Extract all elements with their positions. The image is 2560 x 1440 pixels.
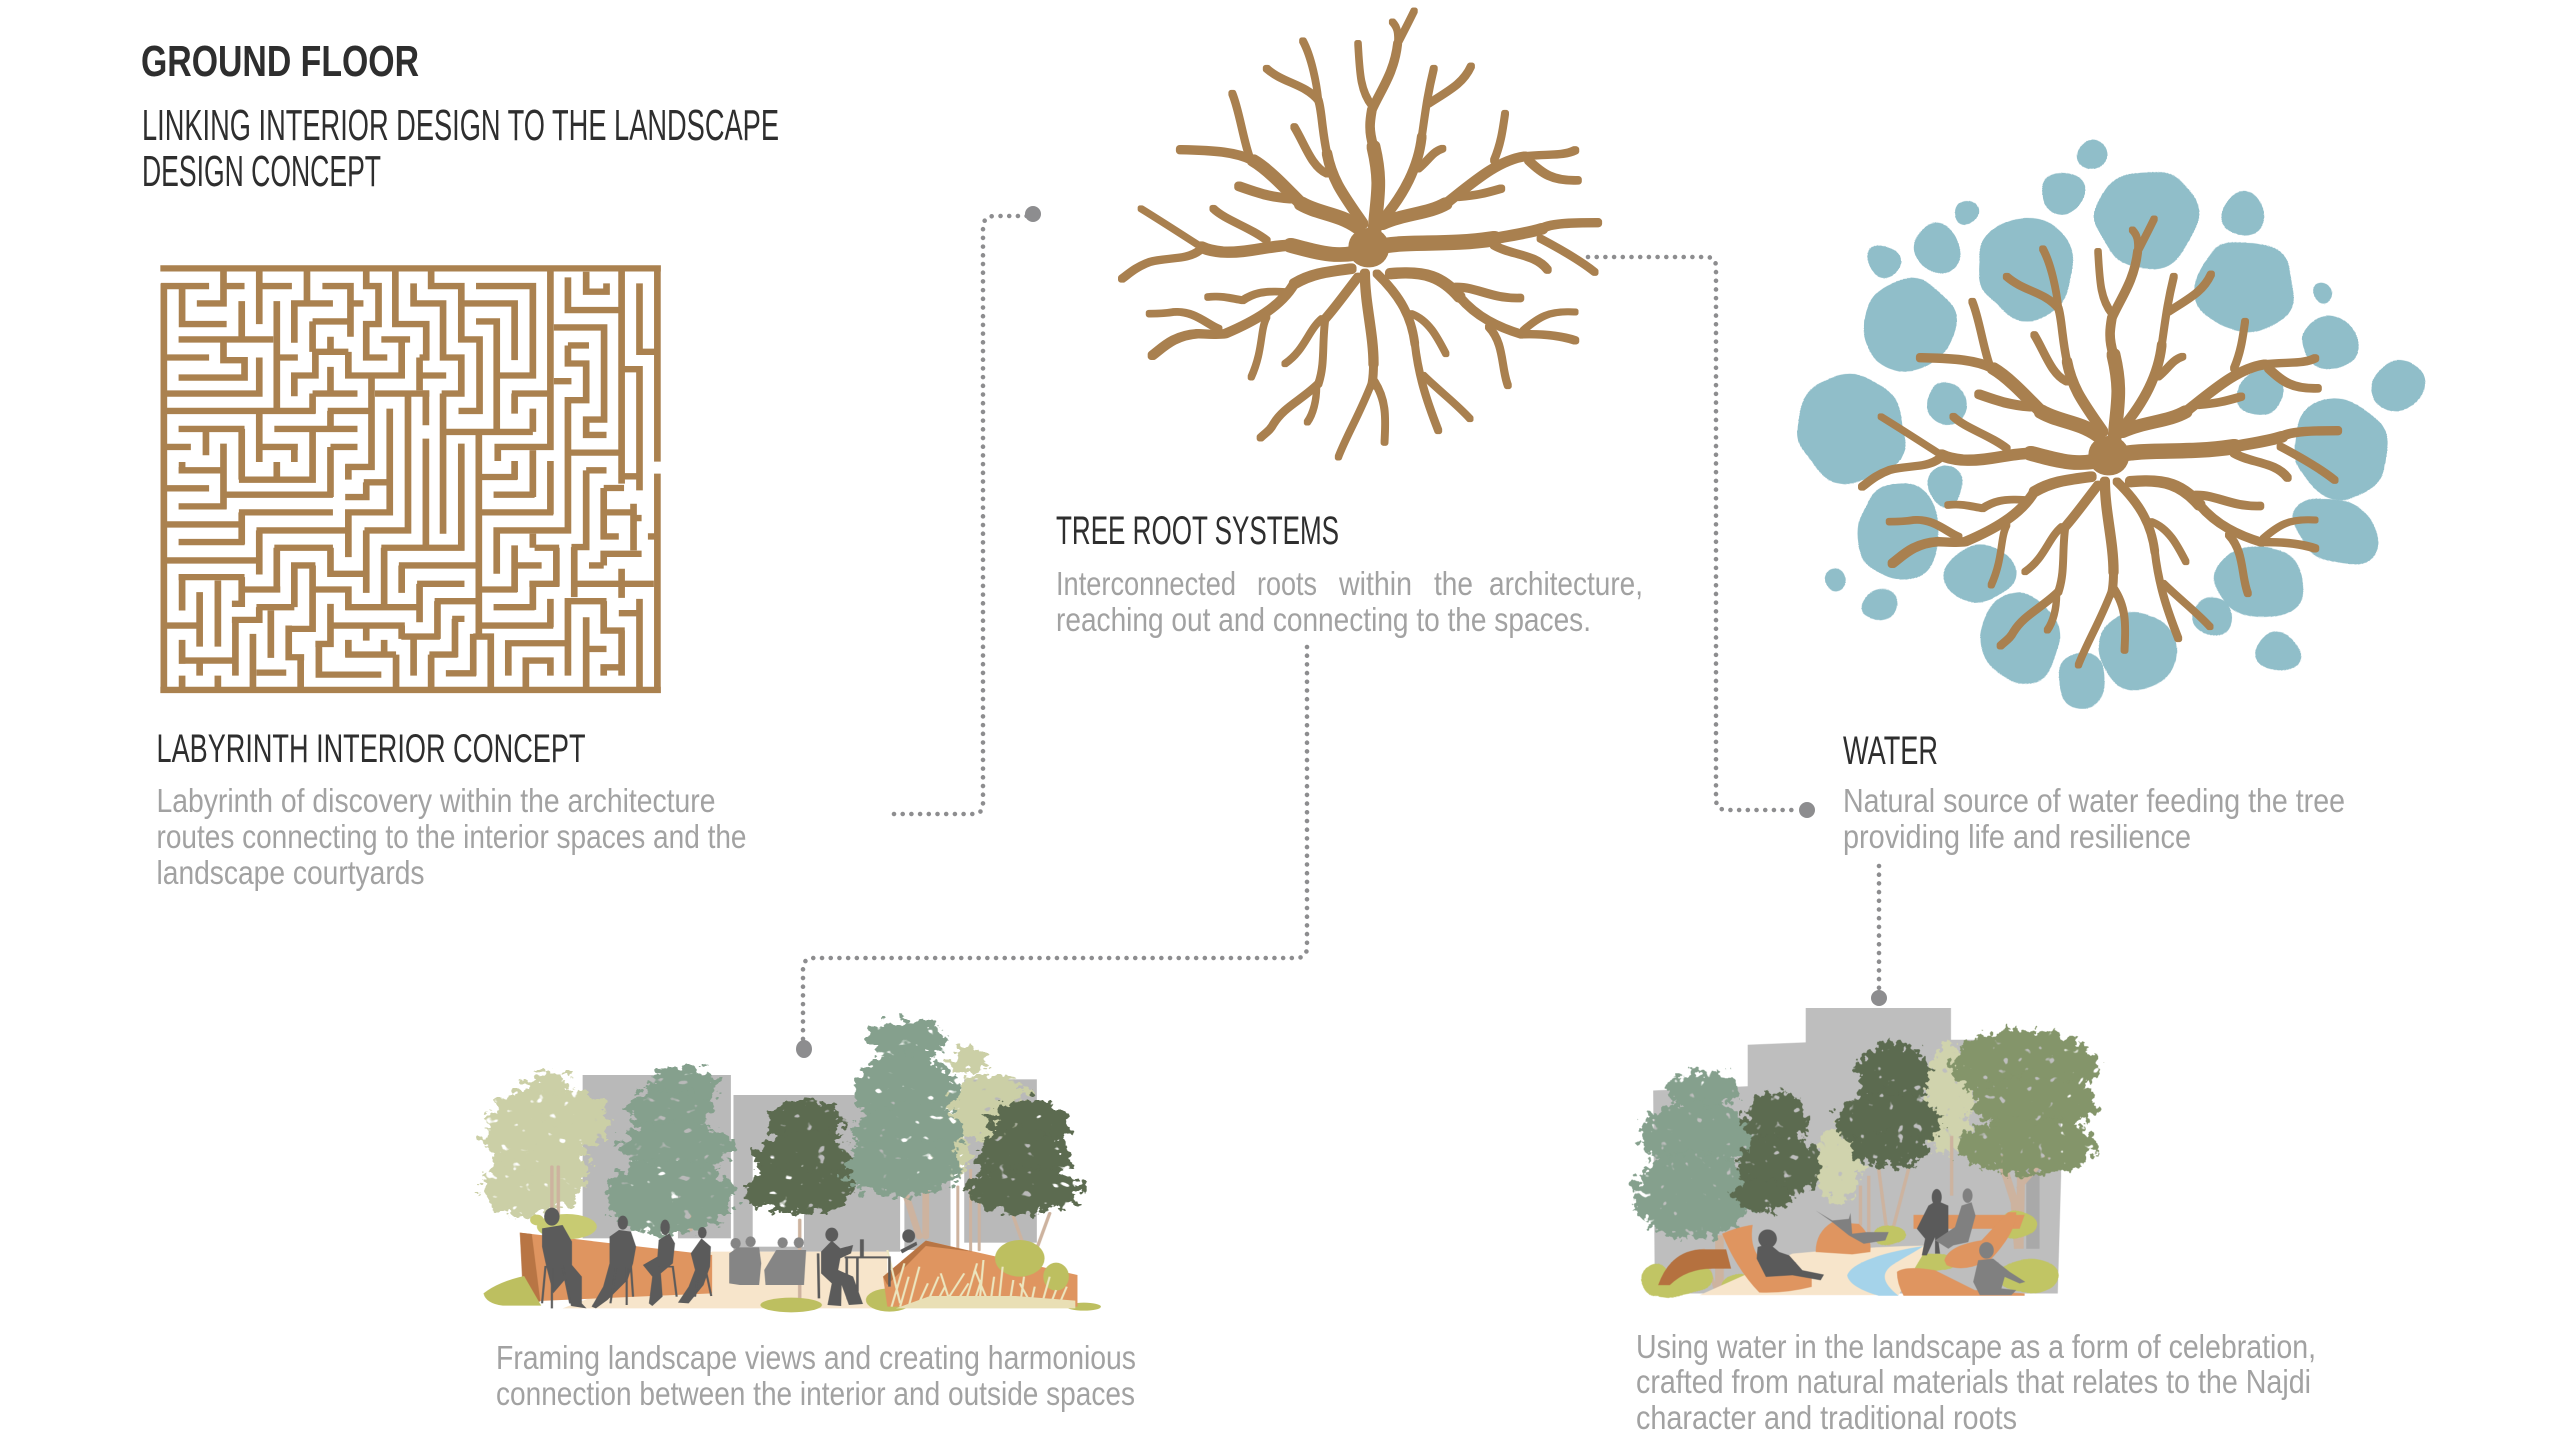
- label: labyrinth interior concept: landscape courtyards: [156, 854, 424, 891]
- label: tree root systems: roots: [1257, 565, 1317, 602]
- scene: water in the landscape: [1628, 1008, 2104, 1298]
- title: ground floor: GROUND FLOOR: [141, 37, 419, 86]
- caption: water in the landscape: crafted from natural materials that relates to the Najdi: [1636, 1363, 2311, 1400]
- caption: water in the landscape: [1636, 1328, 2316, 1436]
- caption: water in the landscape: Using water in the landscape as a form of celebration,: [1636, 1328, 2316, 1365]
- label: water: Natural source of water feeding the tree: [1843, 782, 2345, 819]
- caption: water in the landscape: character and traditional roots: [1636, 1399, 2017, 1436]
- people: [1757, 1189, 1948, 1280]
- label: tree root systems: Interconnected: [1056, 565, 1236, 602]
- people at central table: [729, 1236, 806, 1285]
- connector: water to water scene: [1871, 866, 1887, 1006]
- people on stools: [542, 1208, 711, 1308]
- connector: root to courtyard scene: [796, 647, 1307, 1058]
- corten wall left: [520, 1233, 712, 1302]
- tree root system: [1118, 8, 1602, 460]
- connector: root to water: [1588, 257, 1815, 818]
- label: tree root systems: within: [1338, 565, 1412, 602]
- subtitle: linking interior design: [142, 101, 779, 196]
- scene: framing landscape views: [474, 1013, 1101, 1312]
- shrubs and grass right: [887, 1240, 1075, 1308]
- label: tree root systems: architecture,: [1489, 565, 1643, 602]
- person at bar table: [818, 1228, 917, 1306]
- label: water: providing life and resilience: [1843, 818, 2191, 855]
- ground and water stream: [1700, 1245, 1928, 1296]
- subtitle: linking interior design: DESIGN CONCEPT: [142, 147, 381, 196]
- caption: framing landscape views: Framing landscape views and creating harmonious: [496, 1339, 1136, 1376]
- orange seating forms: [1658, 1212, 2025, 1296]
- label: labyrinth interior concept: LABYRINTH INTERIOR CONCEPT: [156, 727, 586, 771]
- corten wedge right: [883, 1241, 1077, 1307]
- caption: framing landscape views: [496, 1339, 1136, 1412]
- water blobs and roots: [1796, 140, 2421, 706]
- subtitle: linking interior design: LINKING INTERIOR DESIGN TO THE LANDSCAPE: [142, 101, 779, 150]
- shrubs: [1640, 1212, 2058, 1296]
- label: tree root systems: reaching out and connecting to the spaces.: [1056, 601, 1591, 638]
- label: labyrinth interior concept: Labyrinth of discovery within the architecture: [156, 782, 716, 819]
- label: water: [1843, 729, 2345, 855]
- label: tree root systems: [1056, 509, 1643, 638]
- label: tree root systems: TREE ROOT SYSTEMS: [1056, 509, 1339, 553]
- label: labyrinth interior concept: routes connecting to the interior spaces and the: [156, 818, 746, 855]
- caption: framing landscape views: connection between the interior and outside spaces: [496, 1375, 1135, 1412]
- label: labyrinth interior concept: [156, 727, 746, 891]
- planting: [484, 1214, 1101, 1312]
- labyrinth maze: [160, 265, 661, 694]
- label: tree root systems: the: [1434, 565, 1473, 602]
- label: water: WATER: [1843, 729, 1938, 773]
- people in grey: [1816, 1188, 2025, 1295]
- connector: labyrinth to root: [894, 206, 1041, 814]
